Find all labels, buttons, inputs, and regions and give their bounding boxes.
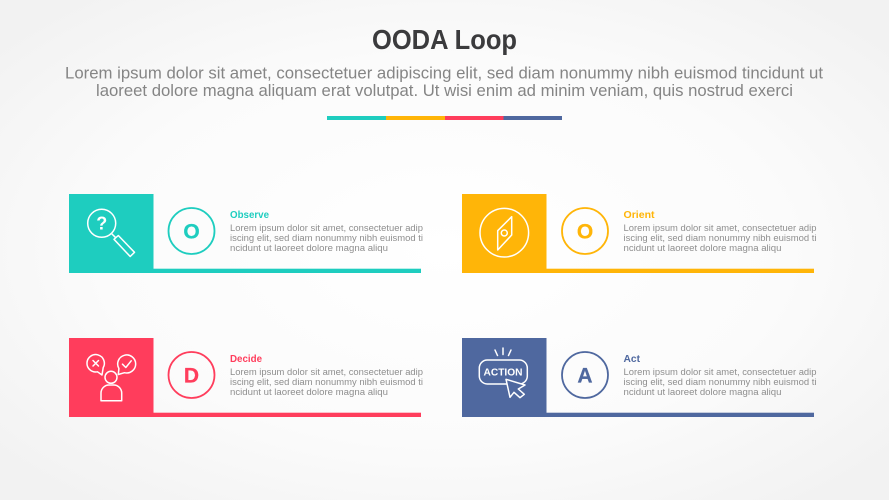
letter badge: O: [562, 208, 608, 254]
icon: magnifying glass with question mark: [88, 209, 134, 256]
text: orient: Lorem ipsum dolor sit amet, consectetuer adip: [624, 223, 816, 233]
text: orient: [624, 209, 816, 253]
icon: compass: [480, 208, 529, 257]
text: observe: Observe: [230, 209, 269, 221]
icon: magnifying glass with question mark: ?: [96, 214, 107, 234]
panel: observe: [69, 194, 423, 273]
panel: decide: [69, 338, 423, 417]
letter badge: A: A: [577, 364, 593, 388]
title: OODA Loop: [372, 24, 517, 55]
text: decide: Lorem ipsum dolor sit amet, consectetuer adip: [230, 367, 423, 377]
text: decide: iscing elit, sed diam nonummy nibh euismod ti: [230, 377, 423, 387]
intro paragraph: Lorem ipsum dolor sit amet, consectetuer adipiscing elit, sed diam nonummy nibh euismod tincidunt ut: [65, 64, 823, 82]
text: act: Act: [624, 353, 640, 365]
text: act: [624, 353, 816, 397]
letter badge: O: O: [183, 220, 200, 244]
text: observe: Lorem ipsum dolor sit amet, consectetuer adip: [230, 223, 423, 233]
letter badge: D: D: [184, 364, 199, 388]
text: orient: Orient: [624, 209, 655, 221]
panel: orient: [462, 194, 816, 273]
letter badge: O: O: [577, 220, 593, 244]
icon: person weighing two options: [87, 355, 136, 401]
text: decide: ncidunt ut laoreet dolore magna aliqu: [230, 387, 388, 397]
text: decide: Decide: [230, 353, 262, 365]
text: act: ncidunt ut laoreet dolore magna aliqu: [624, 387, 782, 397]
icon: action button with cursor: ACTION: [484, 366, 522, 378]
letter badge: O: [168, 208, 214, 254]
intro paragraph: laoreet dolore magna aliquam erat volutpat. Ut wisi enim ad minim veniam, quis nostrud exerci: [96, 82, 793, 100]
four-colour title divider: [327, 116, 562, 120]
letter badge: D: [168, 352, 214, 398]
letter badge: A: [562, 352, 608, 398]
text: orient: ncidunt ut laoreet dolore magna aliqu: [624, 243, 782, 253]
icon: action button with cursor: [479, 348, 527, 398]
text: observe: [230, 209, 423, 253]
text: decide: [230, 353, 423, 397]
text: act: Lorem ipsum dolor sit amet, consectetuer adip: [624, 367, 816, 377]
text: orient: iscing elit, sed diam nonummy nibh euismod ti: [624, 233, 816, 243]
text: act: iscing elit, sed diam nonummy nibh euismod ti: [624, 377, 816, 387]
text: observe: ncidunt ut laoreet dolore magna aliqu: [230, 243, 388, 253]
panel: act: [462, 338, 816, 417]
intro paragraph: [65, 64, 823, 100]
text: observe: iscing elit, sed diam nonummy nibh euismod ti: [230, 233, 423, 243]
